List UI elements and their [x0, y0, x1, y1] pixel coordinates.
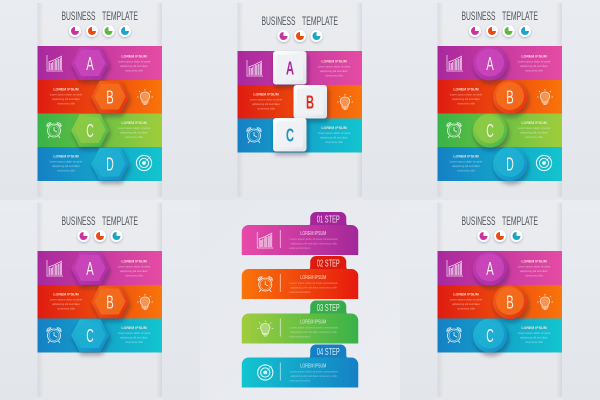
- text blocks: Lorem ipsum dolor sit amet: [118, 59, 150, 63]
- hexagon badges: A: [86, 54, 94, 74]
- title: TEMPLATE: [302, 16, 338, 28]
- circle badges: C: [486, 121, 494, 141]
- text blocks: nonummy nibh: [57, 102, 75, 106]
- hexagon badges: B: [106, 88, 114, 108]
- text blocks: adipiscing elit sed diam: [52, 164, 81, 168]
- hexagon badges: C: [86, 121, 94, 141]
- text blocks: LOREM IPSUM: [453, 154, 479, 158]
- text blocks: adipiscing elit sed diam: [520, 130, 549, 134]
- text blocks: [450, 260, 550, 344]
- step 1 card: Lorem ipsum dolor sit amet consectetuer: [289, 237, 338, 241]
- white tiles: B: [306, 92, 314, 112]
- legend dots: [478, 230, 522, 242]
- step 4 card: Lorem ipsum dolor sit amet consectetuer: [289, 370, 338, 374]
- text blocks: Lorem ipsum dolor sit amet: [118, 331, 150, 335]
- title: BUSINESS: [262, 16, 296, 28]
- text blocks: nonummy nibh: [525, 135, 543, 139]
- step 4 card: euismod tincidunt: [289, 378, 310, 382]
- text blocks: [450, 54, 550, 172]
- circle badges: A: [486, 259, 494, 279]
- legend dots: [69, 25, 131, 37]
- step 2 card: adipiscing elit sed diam nonummy nibh: [291, 286, 337, 290]
- colour bands: [38, 251, 162, 352]
- title: BUSINESS: [462, 11, 496, 23]
- step 4 card: 04 STEP: [317, 347, 340, 358]
- panel: four-step tabbed cards: [200, 200, 400, 400]
- text blocks: adipiscing elit sed diam: [52, 302, 81, 306]
- step 1 card: adipiscing elit sed diam nonummy nibh: [291, 242, 337, 246]
- text blocks: Lorem ipsum dolor sit amet: [518, 331, 550, 335]
- text blocks: adipiscing elit sed diam: [252, 102, 281, 106]
- white tiles: A: [286, 58, 294, 78]
- step 4 card: LOREM IPSUM: [300, 364, 327, 370]
- hexagon badges: A: [86, 259, 94, 279]
- title: BUSINESS: [62, 216, 96, 228]
- colour bands: [438, 46, 562, 181]
- text blocks: Lorem ipsum dolor sit amet: [450, 92, 482, 96]
- text blocks: LOREM IPSUM: [53, 292, 79, 296]
- hexagon badges: B: [106, 292, 114, 312]
- text blocks: LOREM IPSUM: [53, 154, 79, 158]
- text blocks: nonummy nibh: [57, 168, 75, 172]
- text blocks: Lorem ipsum dolor sit amet: [50, 159, 82, 163]
- step 1 card: [222, 212, 382, 255]
- text blocks: nonummy nibh: [325, 74, 343, 78]
- text blocks: [50, 260, 150, 344]
- panel: three-step circles: [400, 200, 600, 400]
- circle badges: D: [506, 154, 514, 174]
- text blocks: LOREM IPSUM: [521, 121, 547, 125]
- text blocks: LOREM IPSUM: [521, 326, 547, 330]
- white tiles: [273, 51, 327, 152]
- icons: [47, 55, 153, 171]
- step 3 card: 03 STEP: [317, 303, 340, 314]
- text blocks: Lorem ipsum dolor sit amet: [318, 131, 350, 135]
- legend dots: [78, 230, 122, 242]
- text blocks: LOREM IPSUM: [453, 88, 479, 92]
- circle badges: B: [506, 88, 514, 108]
- text blocks: nonummy nibh: [525, 274, 543, 278]
- hexagon badges: D: [106, 154, 114, 174]
- text blocks: LOREM IPSUM: [521, 260, 547, 264]
- text blocks: adipiscing elit sed diam: [452, 302, 481, 306]
- text blocks: adipiscing elit sed diam: [120, 64, 149, 68]
- title: BUSINESS: [462, 216, 496, 228]
- text blocks: Lorem ipsum dolor sit amet: [450, 297, 482, 301]
- text blocks: LOREM IPSUM: [121, 260, 147, 264]
- text blocks: Lorem ipsum dolor sit amet: [518, 59, 550, 63]
- text blocks: Lorem ipsum dolor sit amet: [318, 64, 350, 68]
- text blocks: adipiscing elit sed diam: [120, 336, 149, 340]
- step 1 card: LOREM IPSUM: [300, 231, 327, 237]
- text blocks: LOREM IPSUM: [253, 92, 279, 96]
- text blocks: adipiscing elit sed diam: [520, 269, 549, 273]
- step 3 card: adipiscing elit sed diam nonummy nibh: [291, 330, 337, 334]
- text blocks: adipiscing elit sed diam: [520, 64, 549, 68]
- text blocks: nonummy nibh: [325, 140, 343, 144]
- text blocks: LOREM IPSUM: [121, 121, 147, 125]
- icons: [247, 60, 353, 143]
- legend dots: [469, 25, 531, 37]
- text blocks: nonummy nibh: [125, 340, 143, 344]
- text blocks: adipiscing elit sed diam: [452, 164, 481, 168]
- text blocks: Lorem ipsum dolor sit amet: [450, 159, 482, 163]
- step 1 card: 01 STEP: [317, 214, 340, 226]
- text blocks: [50, 54, 150, 172]
- text blocks: Lorem ipsum dolor sit amet: [518, 264, 550, 268]
- text blocks: adipiscing elit sed diam: [320, 136, 349, 140]
- text blocks: adipiscing elit sed diam: [120, 130, 149, 134]
- text blocks: LOREM IPSUM: [121, 326, 147, 330]
- colour bands: [438, 251, 562, 352]
- step 4 card: [222, 344, 382, 388]
- text blocks: LOREM IPSUM: [521, 54, 547, 58]
- title: TEMPLATE: [102, 216, 138, 228]
- step 4 card: adipiscing elit sed diam nonummy nibh: [291, 374, 337, 378]
- text blocks: LOREM IPSUM: [53, 88, 79, 92]
- title: BUSINESS: [62, 11, 96, 23]
- step 2 card: 02 STEP: [317, 258, 340, 270]
- panel: four-step hexagons: [0, 0, 200, 200]
- step 2 card: LOREM IPSUM: [300, 275, 327, 281]
- colour bands: [38, 46, 162, 181]
- circle badges: [473, 252, 527, 352]
- title: TEMPLATE: [502, 11, 538, 23]
- text blocks: adipiscing elit sed diam: [520, 336, 549, 340]
- text blocks: nonummy nibh: [457, 168, 475, 172]
- circle badges: A: [486, 54, 494, 74]
- text blocks: Lorem ipsum dolor sit amet: [118, 264, 150, 268]
- text blocks: adipiscing elit sed diam: [120, 269, 149, 273]
- text blocks: LOREM IPSUM: [321, 60, 347, 64]
- text blocks: nonummy nibh: [125, 68, 143, 72]
- text blocks: LOREM IPSUM: [321, 126, 347, 130]
- text blocks: [250, 60, 350, 144]
- hexagon badges: C: [86, 326, 94, 346]
- step 1 card: euismod tincidunt: [289, 246, 310, 250]
- title: TEMPLATE: [502, 216, 538, 228]
- white tiles: C: [286, 126, 294, 146]
- text blocks: nonummy nibh: [257, 106, 275, 110]
- hexagon badges: [72, 253, 128, 351]
- text blocks: adipiscing elit sed diam: [320, 69, 349, 73]
- panel: four-step circles: [400, 0, 600, 200]
- circle badges: C: [486, 326, 494, 346]
- colour bands: [238, 51, 362, 152]
- text blocks: adipiscing elit sed diam: [452, 97, 481, 101]
- step 2 card: [222, 256, 382, 299]
- text blocks: LOREM IPSUM: [121, 54, 147, 58]
- hexagon badges: [72, 48, 128, 180]
- text blocks: Lorem ipsum dolor sit amet: [518, 126, 550, 130]
- step 3 card: Lorem ipsum dolor sit amet consectetuer: [289, 326, 338, 330]
- text blocks: Lorem ipsum dolor sit amet: [50, 92, 82, 96]
- title: TEMPLATE: [102, 11, 138, 23]
- text blocks: Lorem ipsum dolor sit amet: [50, 297, 82, 301]
- text blocks: adipiscing elit sed diam: [52, 97, 81, 101]
- text blocks: nonummy nibh: [125, 135, 143, 139]
- text blocks: nonummy nibh: [525, 340, 543, 344]
- text blocks: Lorem ipsum dolor sit amet: [250, 97, 282, 101]
- step 3 card: euismod tincidunt: [289, 334, 310, 338]
- text blocks: Lorem ipsum dolor sit amet: [118, 126, 150, 130]
- icons: [47, 260, 153, 343]
- text blocks: nonummy nibh: [457, 102, 475, 106]
- text blocks: nonummy nibh: [525, 68, 543, 72]
- text blocks: nonummy nibh: [125, 274, 143, 278]
- step 2 card: euismod tincidunt: [289, 290, 310, 294]
- step 2 card: Lorem ipsum dolor sit amet consectetuer: [289, 281, 338, 285]
- step 3 card: LOREM IPSUM: [300, 320, 327, 326]
- circle badges: [473, 46, 527, 181]
- circle badges: B: [506, 292, 514, 312]
- step 3 card: [222, 300, 382, 344]
- text blocks: LOREM IPSUM: [453, 292, 479, 296]
- text blocks: nonummy nibh: [57, 306, 75, 310]
- legend dots: [278, 30, 322, 42]
- icons: [447, 260, 553, 343]
- icons: [447, 55, 553, 171]
- text blocks: nonummy nibh: [457, 306, 475, 310]
- panel: three-step hexagons: [0, 200, 200, 400]
- panel: three-step white tiles: [200, 0, 400, 200]
